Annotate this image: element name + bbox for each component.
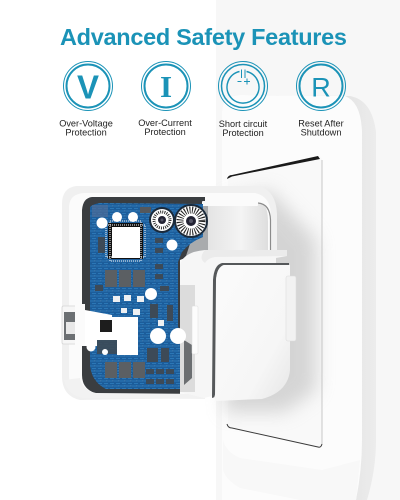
- white frame: [180, 250, 287, 398]
- icon: over-current I: [142, 62, 190, 110]
- circuit board: [90, 203, 208, 389]
- icon: over-voltage V: V: [77, 68, 99, 106]
- label: short circuit: Protection: [222, 128, 264, 138]
- icon: over-voltage V: [64, 62, 112, 110]
- icon: reset R: [296, 62, 346, 110]
- label: short circuit: Short circuit: [219, 119, 268, 129]
- title: Advanced Safety Features: [60, 24, 347, 50]
- label: reset after shutdown: Reset After: [298, 118, 344, 128]
- small white pads: [113, 295, 164, 326]
- switch rocker: [227, 156, 322, 447]
- charger shadow on plate: [225, 190, 316, 412]
- inner rib: [192, 306, 198, 354]
- outer shell: [62, 186, 277, 400]
- side clip: [286, 276, 296, 341]
- icon row: [59, 62, 346, 138]
- icon: over-current I: I: [160, 69, 172, 104]
- label: over-current: Protection: [144, 127, 186, 137]
- white capacitors: [96, 212, 178, 300]
- main chip: [106, 221, 145, 261]
- label: over-voltage: Protection: [65, 128, 107, 138]
- icon: short circuit: [218, 62, 268, 110]
- dark cavity: [82, 197, 205, 394]
- small coil: [149, 207, 175, 233]
- round capacitors bottom: [150, 328, 186, 344]
- label: over-voltage: Over-Voltage: [59, 118, 113, 128]
- wall background: [216, 0, 400, 500]
- label: reset after shutdown: Shutdown: [301, 128, 341, 138]
- small transistors: [95, 237, 174, 384]
- power transistors bottom: [105, 362, 145, 378]
- icon: reset R: R: [311, 72, 331, 102]
- front cap: [180, 250, 296, 401]
- prong block: [202, 201, 270, 252]
- wall switch plate: [222, 95, 376, 500]
- large coil: [174, 204, 208, 238]
- usb connector latch: [62, 304, 138, 355]
- charger body: [62, 186, 277, 400]
- bottom shell lip: [64, 378, 205, 399]
- label: over-current: Over-Current: [138, 118, 192, 128]
- power transistors top: [105, 270, 145, 287]
